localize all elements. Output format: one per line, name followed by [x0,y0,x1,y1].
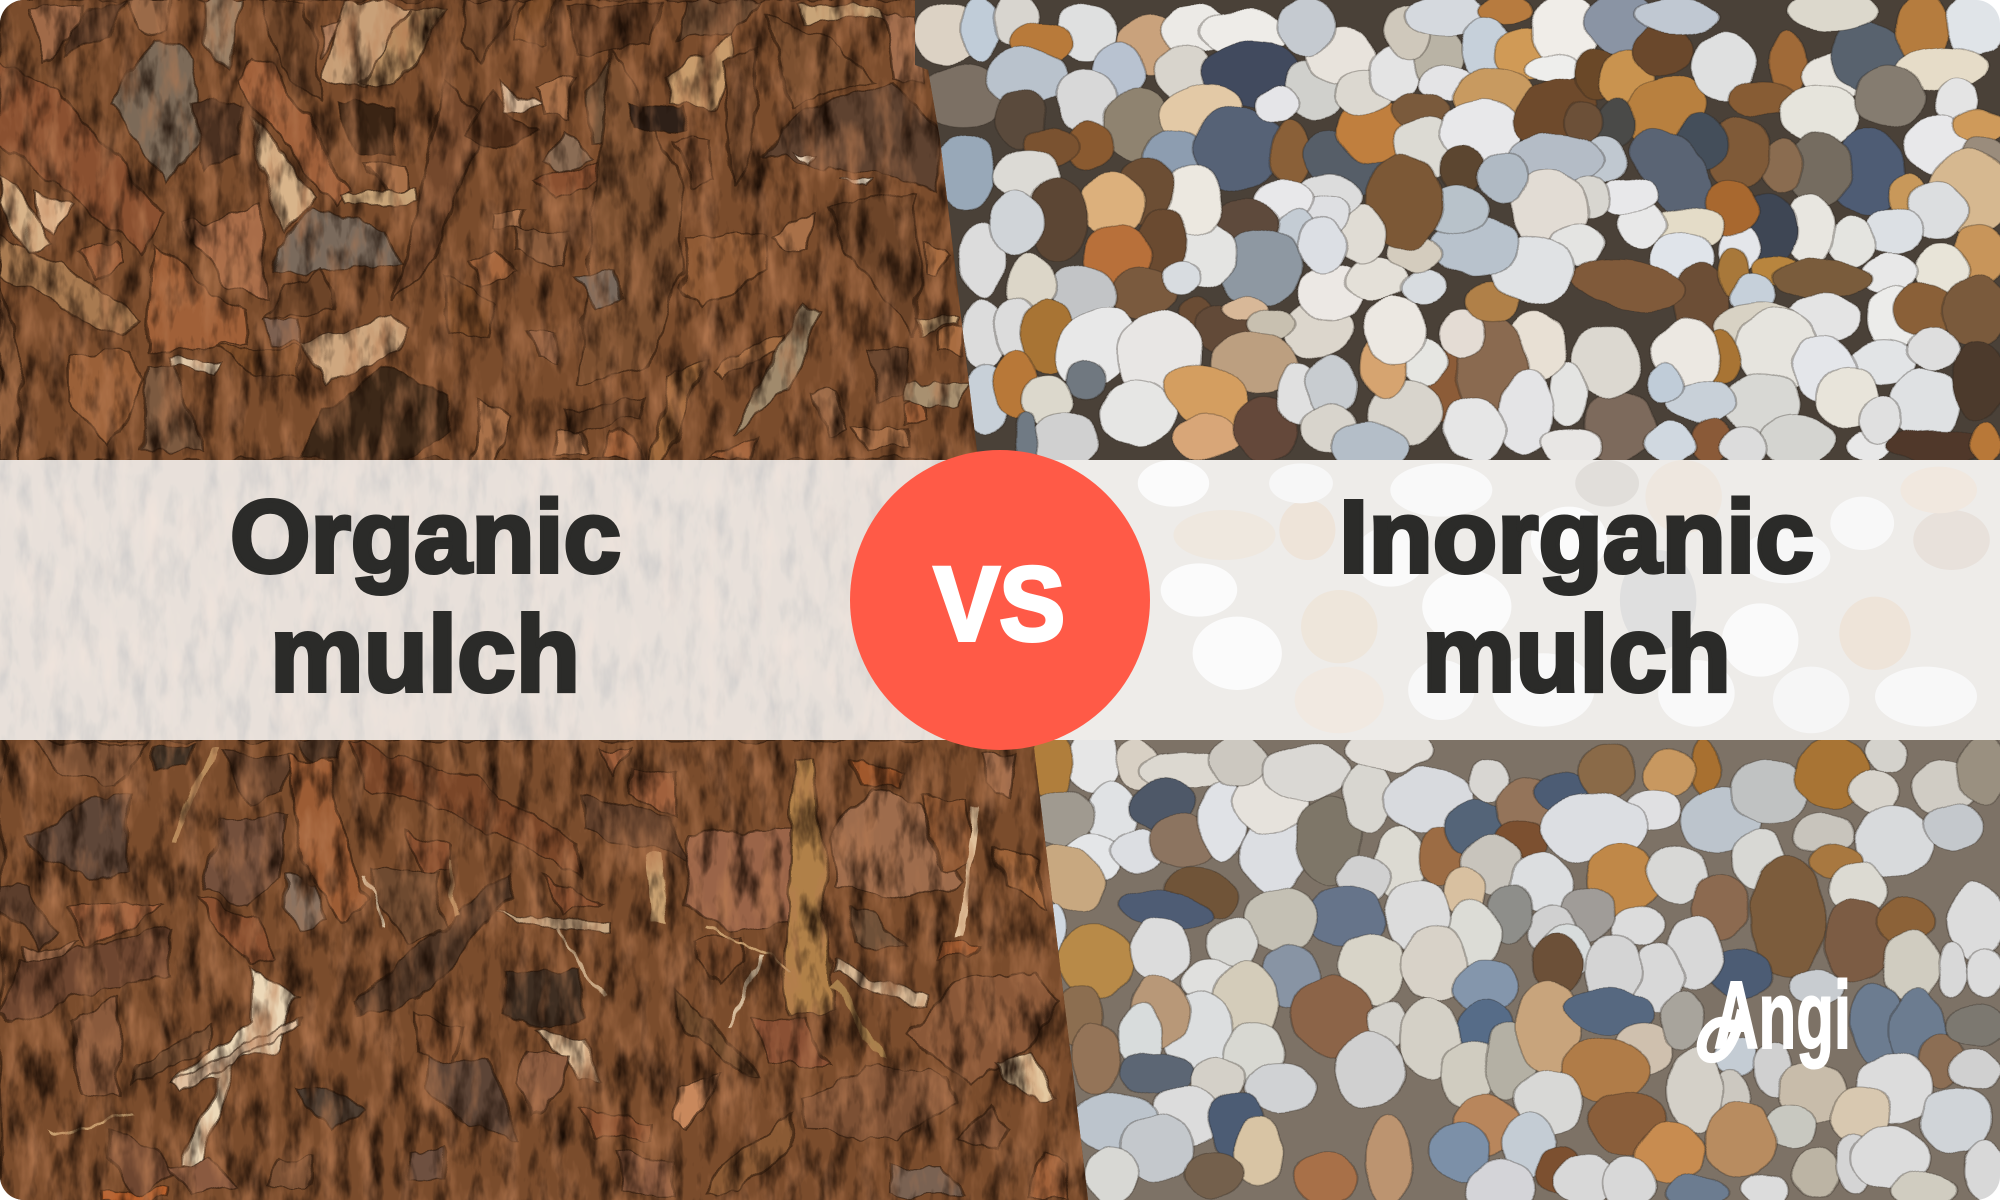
banner left tint [0,460,940,740]
logo: Angi: Angi [1714,962,1851,1069]
panel: banner background tints seen through overlay [1000,460,2000,740]
bark chips, bottom section [0,740,1101,1200]
panel: inorganic mulch pebble photo, top [880,0,2000,471]
heading: Inorganic mulch: mulch [1422,593,1731,714]
panel: organic mulch bark photo [0,0,1101,1200]
panel: inorganic mulch pebble photo, bottom [980,725,2000,1200]
heading: Organic mulch: Organic [230,479,621,594]
wood grain shadows [0,0,1100,1200]
heading: Organic mulch [232,496,620,694]
heading: Inorganic mulch: Inorganic [1339,479,1814,594]
bark chips, top section [0,0,995,460]
badge: red VS circle [850,450,1150,750]
badge: red VS circle: VS [934,546,1065,663]
logo: Angi [1696,978,1848,1070]
wood grain highlights [0,0,1100,1200]
banner: translucent white strip [0,460,2000,740]
heading: Inorganic mulch [1344,496,1814,694]
heading: Organic mulch: mulch [270,593,580,714]
